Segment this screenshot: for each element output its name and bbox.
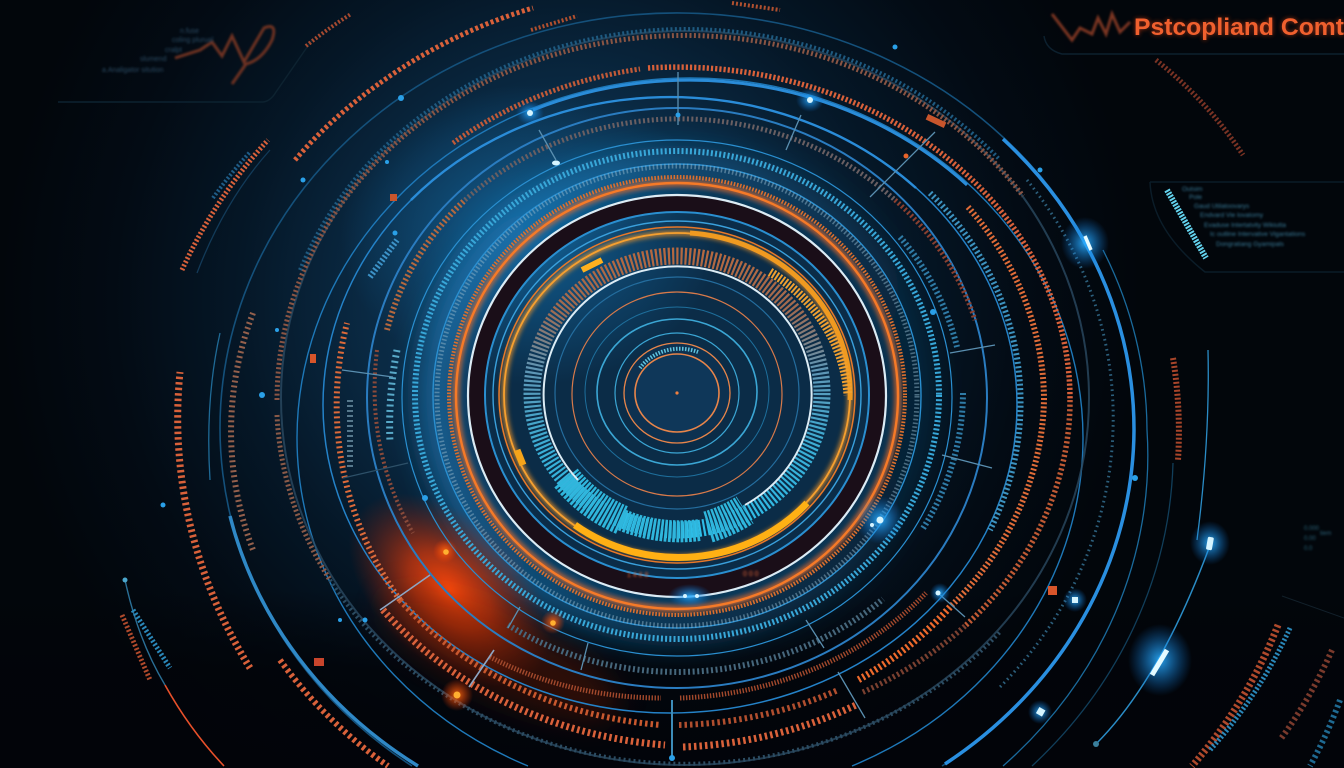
panel text xyxy=(102,28,214,74)
arc: dim top ring left xyxy=(387,200,465,330)
arc: upper left band xyxy=(380,8,533,83)
arc: upper right dim ticks xyxy=(1156,60,1243,155)
orange glowing nodes xyxy=(310,114,1057,711)
panel text xyxy=(1182,186,1306,248)
inner small ticks xyxy=(640,349,698,368)
ring inner full xyxy=(402,140,952,656)
ring B top xyxy=(411,97,916,200)
ring A full xyxy=(297,78,1083,766)
bottom yellow thick arc xyxy=(575,503,807,557)
arc: top orange band xyxy=(648,67,1070,400)
arc: double band upper blue xyxy=(300,29,1000,270)
white outer ring xyxy=(468,195,886,597)
blue haze upper left of centre xyxy=(340,85,720,385)
small orange labels on core: 0 0 0 xyxy=(743,571,759,578)
title glow: Pstcopliand Comt xyxy=(1134,14,1344,41)
end node xyxy=(1093,741,1099,747)
dark red glow under bands xyxy=(365,564,635,746)
inner rings xyxy=(544,266,812,509)
arc: dim top ring middle xyxy=(465,119,895,200)
small side labels xyxy=(1304,526,1331,552)
far right thin arcs xyxy=(1093,350,1209,747)
thin orange ring xyxy=(572,292,782,496)
blue rings xyxy=(555,277,799,509)
panel text: cralpt xyxy=(165,47,182,54)
arc: dim top ring right xyxy=(895,200,975,320)
panel: lower right ticks and labels xyxy=(1192,526,1344,766)
small orange labels on core: 1 4 8 8 xyxy=(627,572,649,579)
thin orange curve xyxy=(165,685,224,766)
thin blue curve xyxy=(125,580,165,685)
panel text: coling plurual xyxy=(172,37,214,44)
panel text: a.Analigator sitution xyxy=(102,67,164,74)
orange glow ring xyxy=(456,183,898,609)
arc: far left upper band xyxy=(182,140,268,270)
lower dark fade xyxy=(0,590,1344,768)
panel: top-left readout xyxy=(58,26,312,102)
orange glow lower left xyxy=(313,456,587,724)
arc: far left upper blue companion xyxy=(213,152,250,198)
central disc xyxy=(624,343,730,443)
upper right thick orange arc xyxy=(690,233,850,400)
arc: double band lower brown xyxy=(277,415,330,580)
arc: inner right blue band xyxy=(900,237,957,347)
small side labels: 0.00 xyxy=(1304,536,1316,542)
curve node xyxy=(122,578,128,582)
arc: small upper left band xyxy=(306,14,351,46)
arc: left small blue band xyxy=(370,240,397,277)
far left labelled curve xyxy=(122,578,224,766)
centre dot xyxy=(675,391,679,395)
yellow block upper left xyxy=(582,260,602,270)
panel: right readout xyxy=(1150,182,1344,272)
blue glowing nodes xyxy=(160,44,1230,761)
arc: bottom second right xyxy=(679,690,838,725)
big ring right xyxy=(945,139,1134,764)
far right thin arcs xyxy=(1003,250,1148,766)
pale tick ring xyxy=(437,166,917,626)
arc: double band upper orange xyxy=(277,35,1023,400)
ring D full xyxy=(367,108,987,688)
blue tick arc xyxy=(1210,628,1290,750)
title: Pstcopliand Comt xyxy=(1134,14,1344,41)
yellow block lower left xyxy=(517,450,523,465)
arc: right blue band xyxy=(930,193,1021,530)
orange glow halo xyxy=(456,183,898,609)
panel text: Outsim xyxy=(1182,186,1203,193)
arc: mid left orange band xyxy=(337,323,400,600)
arc: far left long band xyxy=(178,372,250,668)
arc: left dim orange band xyxy=(375,350,413,533)
arc: bottom outer left xyxy=(383,610,665,745)
arc: fine orange text band xyxy=(490,593,926,698)
arc: dim lower ring xyxy=(508,599,883,672)
yellow ring glow xyxy=(504,233,850,557)
blue rings xyxy=(485,212,869,578)
blue halo around the core xyxy=(439,168,915,624)
bar histogram xyxy=(566,478,745,531)
core backing disc xyxy=(452,179,902,611)
arc: inner right band xyxy=(950,207,1044,607)
bright blue arcs xyxy=(230,80,1134,766)
arc: far left gray band xyxy=(231,313,253,550)
outer thin rings xyxy=(197,13,1173,766)
arc: left cyan band xyxy=(390,350,397,443)
squiggle logo xyxy=(1052,14,1130,40)
upper right orange ticks xyxy=(770,272,848,395)
panel text: Dongratiang Gyamipals xyxy=(1216,241,1285,248)
arc: right dim orange ticks xyxy=(1173,358,1179,460)
arc: bottom second left xyxy=(400,600,661,725)
arc: top small bands xyxy=(531,3,780,30)
orange dashes outer xyxy=(449,177,905,615)
panel text: Endvard Vie lovatomy xyxy=(1200,212,1264,219)
arc: lower left band xyxy=(280,660,388,766)
blue far arc xyxy=(1310,700,1340,766)
core rings xyxy=(449,177,905,615)
arc: dotted lower xyxy=(330,580,1000,764)
tick labels xyxy=(122,615,150,680)
dim tick arc xyxy=(1280,650,1332,740)
bottom grey ring xyxy=(281,31,1089,765)
panel text: slumend xyxy=(140,56,167,63)
panel text: Pole xyxy=(1189,194,1202,201)
tick arcs xyxy=(178,3,1113,766)
small side labels: 0.0 xyxy=(1304,546,1313,552)
cyan tick ring xyxy=(415,151,939,639)
arc: inner right blue band lower xyxy=(922,393,963,530)
arc: top-left orange band xyxy=(453,69,640,143)
cyan tick bar xyxy=(1167,190,1206,258)
arc: right orange fading band xyxy=(861,626,965,693)
spoke lines xyxy=(342,72,995,757)
ring A top xyxy=(533,80,967,185)
arc: dotted far right xyxy=(1000,180,1113,687)
big ring dim full xyxy=(220,13,1134,766)
panel text: Evaduse Intertatvity Wikiutta xyxy=(1204,222,1286,229)
dark maroon band around the core xyxy=(477,203,877,587)
arc: upper left lower band xyxy=(295,83,380,160)
panel: title header xyxy=(1044,14,1344,54)
small side labels: tiem xyxy=(1320,531,1331,537)
thin orange ring xyxy=(499,227,855,563)
white inner ring xyxy=(544,266,812,505)
arc: left gray band xyxy=(347,400,353,467)
ring B full xyxy=(323,97,1017,713)
squiggle graph xyxy=(175,26,274,84)
big ring lower left xyxy=(230,516,418,766)
arc: bottom outer right xyxy=(683,705,856,747)
panel text: Ic outline Intervative Vigantations xyxy=(1210,231,1306,238)
bar ring xyxy=(532,256,822,530)
small orange labels on core xyxy=(627,571,759,579)
panel text: Gaud Utilatoovarys xyxy=(1194,203,1250,210)
far left thin arcs xyxy=(209,333,220,480)
yellow ring xyxy=(504,233,850,557)
small side labels: 0.000 xyxy=(1304,526,1320,532)
orange tick arc xyxy=(1192,625,1278,766)
panel text: n.fuse xyxy=(180,28,199,35)
arc: right orange lower band xyxy=(965,400,1070,626)
arc: lower right bright band xyxy=(858,607,950,680)
